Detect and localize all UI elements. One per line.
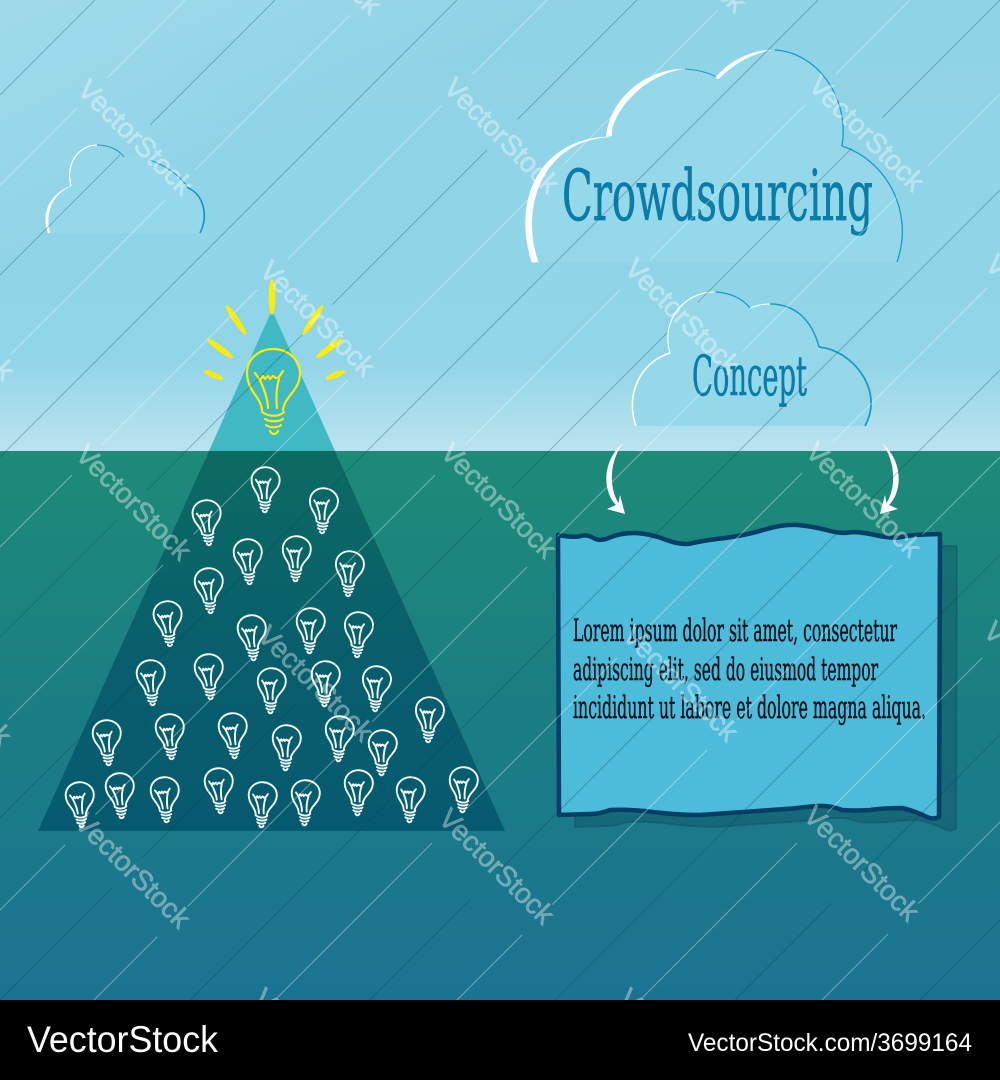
light rays [203, 279, 346, 382]
footer bar [0, 1000, 1000, 1080]
crowd of white bulbs [65, 467, 478, 828]
icon: bulb [308, 487, 339, 534]
icon: bulb [92, 719, 122, 766]
icon: bulb [233, 538, 263, 585]
icon: bulb [192, 499, 223, 546]
icon: bulb [290, 780, 320, 826]
icon: bulb [153, 600, 184, 647]
text panel shadow [575, 546, 957, 830]
watermarks: VectorStock [619, 253, 747, 381]
icon: bulb [448, 767, 478, 813]
icon: bulb [395, 777, 425, 823]
icon: bulb [343, 611, 374, 658]
watermarks: VectorStock [70, 439, 198, 567]
icon: bulb [136, 659, 166, 706]
pyramid tip above water [209, 310, 335, 451]
footer logo text: VectorStock [27, 1019, 218, 1060]
icon: bulb [281, 536, 311, 582]
icon: bulb [194, 567, 224, 614]
icon: bulb [247, 782, 277, 828]
watermarks: VectorStock [72, 74, 200, 202]
text panel [558, 525, 940, 818]
icon: bulb [155, 713, 185, 760]
icon: bulb [105, 772, 135, 819]
sky background [0, 0, 1000, 451]
sea background [0, 451, 1000, 1000]
cloud: large crowdsourcing [526, 50, 902, 262]
arrow: right [880, 443, 899, 514]
infographic canvas: Concept [692, 344, 807, 408]
icon: bulb [204, 767, 234, 814]
icon: bulb [256, 668, 286, 714]
watermarks: VectorStock [438, 72, 566, 200]
footer image id: VectorStock.com/3699164 [688, 1029, 972, 1057]
icon: bulb [367, 730, 397, 776]
watermarks: V [248, 982, 283, 1018]
watermarks: VectorStock [254, 255, 382, 383]
watermarks: VectorStock [803, 70, 931, 198]
panel body text [573, 613, 926, 726]
watermarks: VectorStock [69, 807, 197, 935]
watermarks: VectorStock [433, 803, 561, 931]
watermarks: VectorStock [798, 800, 926, 928]
cloud: medium concept [632, 292, 871, 426]
watermarks: VectorStock [252, 620, 380, 748]
icon: bulb [250, 467, 280, 513]
icon: bulb [361, 665, 392, 712]
icon: bulb [237, 614, 267, 661]
icon: bulb [414, 696, 445, 743]
icon: yellow lit bulb [247, 349, 300, 434]
icon: bulb [310, 661, 340, 707]
cloud: small left [46, 145, 204, 233]
icon: bulb [65, 781, 95, 828]
watermarks: VectorStock [800, 436, 928, 564]
icon: bulb [295, 608, 325, 654]
pyramid [38, 310, 505, 831]
icon: bulb [150, 776, 180, 823]
icon: bulb [218, 712, 248, 759]
pyramid body below water [38, 451, 505, 831]
icon: bulb [343, 770, 373, 816]
watermarks: V [613, 982, 648, 1018]
watermarks: VectorStock [435, 437, 563, 565]
arrow: left [606, 443, 625, 514]
icon: bulb [194, 653, 224, 700]
icon: bulb [324, 716, 354, 762]
icon: bulb [334, 550, 365, 597]
icon: bulb [271, 725, 301, 771]
watermarks: VectorStock [617, 620, 745, 748]
